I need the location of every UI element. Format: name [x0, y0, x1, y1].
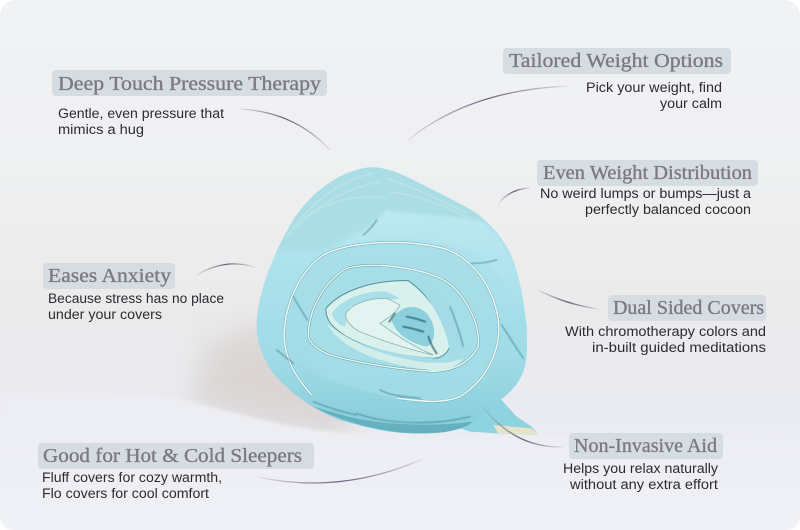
- lower pale band: [327, 323, 463, 371]
- body text line 2: under your covers: [48, 307, 162, 322]
- heading: Tailored Weight Options: [509, 50, 723, 72]
- heading pill: [569, 433, 723, 459]
- arrow curve: [240, 109, 330, 150]
- spiral band 1: [285, 243, 499, 402]
- blanket outer silhouette: [257, 167, 527, 433]
- arrow curve: [197, 264, 254, 275]
- callout: dual sided covers: [538, 290, 766, 355]
- body text: Because stress has no place: [48, 291, 224, 306]
- lower blue fold: [337, 330, 452, 363]
- heading: Non-Invasive Aid: [574, 435, 717, 457]
- body text: No weird lumps or bumps—just a: [540, 186, 752, 201]
- white seam 1: [284, 243, 499, 401]
- heading pill: [52, 70, 327, 96]
- body text line 2: in-built guided meditations: [592, 340, 766, 355]
- callout: non-invasive aid: [483, 407, 723, 492]
- heading: Deep Touch Pressure Therapy: [58, 73, 321, 95]
- rolled blanket illustration: [257, 160, 538, 435]
- body text line 2: mimics a hug: [58, 122, 144, 137]
- body text: Gentle, even pressure that: [58, 106, 224, 121]
- blanket stripes: [287, 173, 470, 237]
- heading pill: [537, 160, 758, 186]
- body text: Fluff covers for cozy warmth,: [42, 470, 222, 485]
- heading pill: [608, 295, 766, 321]
- heading: Dual Sided Covers: [613, 297, 764, 319]
- blanket back top: [278, 167, 484, 250]
- spiral band 2: [308, 265, 478, 371]
- callout: deep touch pressure therapy: [52, 70, 330, 150]
- callout: eases anxiety: [43, 263, 254, 322]
- arrow curve: [499, 188, 530, 203]
- arrow curve: [538, 290, 598, 309]
- roll shadow: [190, 320, 350, 440]
- body text: With chromotherapy colors and: [565, 324, 766, 339]
- body text line 2: perfectly balanced cocoon: [585, 202, 751, 217]
- arrow curve: [408, 86, 568, 140]
- heading: Eases Anxiety: [48, 265, 171, 287]
- arrow curve: [483, 407, 562, 447]
- creases: [277, 220, 523, 423]
- heading: Even Weight Distribution: [543, 162, 752, 184]
- center blue pocket: [332, 291, 400, 327]
- heading: Good for Hot & Cold Sleepers: [43, 445, 302, 467]
- heading pill: [38, 443, 314, 469]
- body text: Helps you relax naturally: [563, 461, 718, 476]
- heading pill: [43, 263, 175, 289]
- blanket tail: [460, 398, 538, 435]
- roll underside shade: [313, 407, 473, 433]
- callout: tailored weight options: [408, 48, 731, 140]
- blanket tag: [493, 425, 538, 435]
- heading pill: [503, 48, 731, 74]
- callout: even weight distribution: [499, 160, 758, 217]
- body text line 2: without any extra effort: [569, 477, 718, 492]
- floor: [0, 392, 800, 530]
- body text line 2: Flo covers for cool comfort: [42, 486, 209, 501]
- center pale folds: [346, 298, 433, 355]
- body text line 2: your calm: [660, 96, 722, 111]
- blue right fold: [410, 278, 463, 358]
- arrow curve: [258, 459, 423, 483]
- pale inner band: [326, 281, 450, 358]
- callout: good for hot and cold sleepers: [38, 443, 423, 501]
- body text: Pick your weight, find: [586, 80, 722, 95]
- blanket front top fold: [346, 210, 526, 324]
- soft shaded folds: [278, 167, 526, 324]
- white seam 2: [308, 265, 478, 371]
